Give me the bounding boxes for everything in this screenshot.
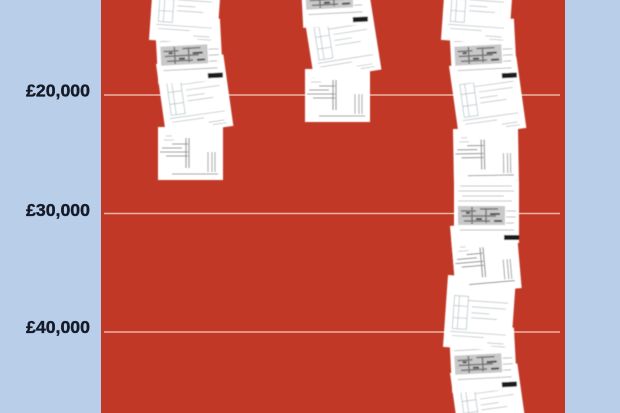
receipt: lower scan bbox=[449, 328, 517, 393]
axis labels bbox=[26, 80, 90, 337]
receipt: top form bbox=[441, 0, 514, 45]
receipt: lower top form bbox=[443, 275, 516, 352]
label: 20,000: £20,000 bbox=[26, 80, 90, 100]
receipt: scan bbox=[155, 19, 223, 84]
receipt: bottom form bbox=[450, 364, 527, 413]
receipt: top form bbox=[149, 0, 222, 45]
red chart panel bbox=[101, 0, 565, 413]
receipt: middle scan bbox=[454, 181, 519, 243]
receipt stack: left column bbox=[149, 0, 233, 180]
receipt: list bbox=[158, 127, 223, 180]
receipt: upper scan bbox=[449, 19, 517, 84]
receipt: lower list bbox=[450, 220, 522, 294]
receipt: scan bbox=[300, 0, 368, 28]
receipt stack: right column bbox=[441, 0, 527, 413]
label: 40,000: £40,000 bbox=[26, 317, 90, 337]
gridlines bbox=[104, 95, 560, 332]
receipt: upper form bbox=[449, 57, 526, 137]
receipt: list bbox=[305, 69, 370, 122]
receipt: form bbox=[156, 55, 233, 135]
receipt stack: middle column bbox=[300, 0, 381, 122]
receipt: form bbox=[303, 0, 381, 80]
label: 30,000: £30,000 bbox=[26, 200, 90, 220]
receipt: upper list bbox=[453, 128, 519, 182]
